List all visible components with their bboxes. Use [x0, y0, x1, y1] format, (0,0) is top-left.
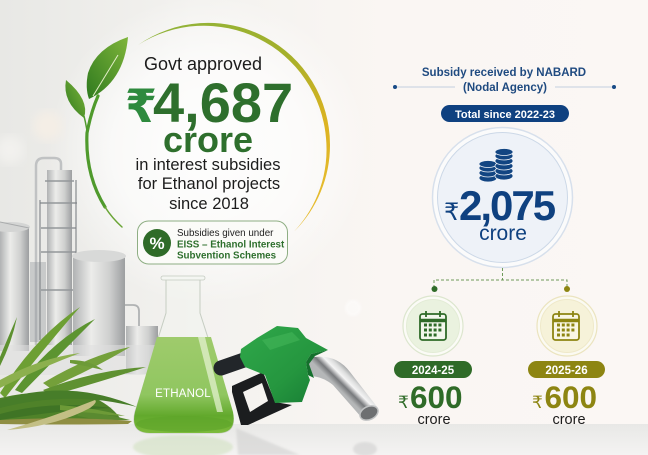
year panel: 2025-26 — [528, 296, 605, 428]
year panel: 2025-26: ₹ — [532, 393, 543, 412]
callout: EISS schemes — [138, 221, 288, 264]
callout: EISS schemes: Subsidies given under — [177, 228, 274, 239]
year panel: 2024-25: crore — [417, 412, 451, 428]
pill: total since — [441, 105, 569, 122]
callout: EISS schemes: EISS – Ethanol Interest — [177, 240, 285, 250]
callout: EISS schemes: Subvention Schemes — [177, 250, 277, 262]
leaf sprig — [65, 37, 128, 227]
description text: for Ethanol projects — [138, 175, 280, 193]
big green arc — [138, 23, 330, 231]
year panel: 2024-25: 600 — [410, 379, 463, 415]
description text: since 2018 — [169, 195, 249, 213]
icon: calendar — [553, 311, 579, 340]
fuel nozzle — [221, 326, 380, 425]
year panel: 2025-26: 600 — [544, 379, 597, 415]
year panel: 2024-25: 2024-25 — [412, 365, 455, 377]
refinery plant — [0, 158, 160, 375]
heading: NABARD: (Nodal Agency) — [463, 82, 547, 94]
description text — [136, 156, 280, 213]
pill: total since: Total since 2022-23 — [455, 109, 555, 121]
heading: NABARD: Subsidy received by NABARD — [422, 67, 586, 79]
headline unit: crore: crore — [163, 119, 253, 160]
flask: ethanol — [134, 276, 234, 433]
year panel: 2025-26: 2025-26 — [545, 365, 588, 377]
icon: calendar — [420, 311, 446, 340]
connector — [432, 268, 570, 292]
heading: Govt approved: Govt approved — [144, 54, 262, 74]
description text: in interest subsidies — [136, 156, 280, 174]
heading: NABARD — [393, 67, 616, 94]
year panel: 2024-25 — [394, 296, 472, 428]
flask label: ETHANOL — [155, 388, 211, 400]
total circle: crore — [479, 222, 527, 245]
total circle: ₹ — [444, 199, 459, 226]
headline amount: 4,687: 4,687 — [153, 71, 293, 134]
total circle: 2,075 — [459, 182, 556, 229]
icon: coins — [479, 148, 513, 182]
sugarcane leaves — [0, 307, 146, 430]
total circle — [432, 128, 572, 268]
floor — [0, 424, 648, 455]
year panel: 2024-25: ₹ — [398, 393, 409, 412]
headline amount: 4,687: ₹ — [125, 80, 157, 132]
year panel: 2025-26: crore — [552, 412, 586, 428]
callout: EISS schemes: % — [149, 234, 165, 253]
